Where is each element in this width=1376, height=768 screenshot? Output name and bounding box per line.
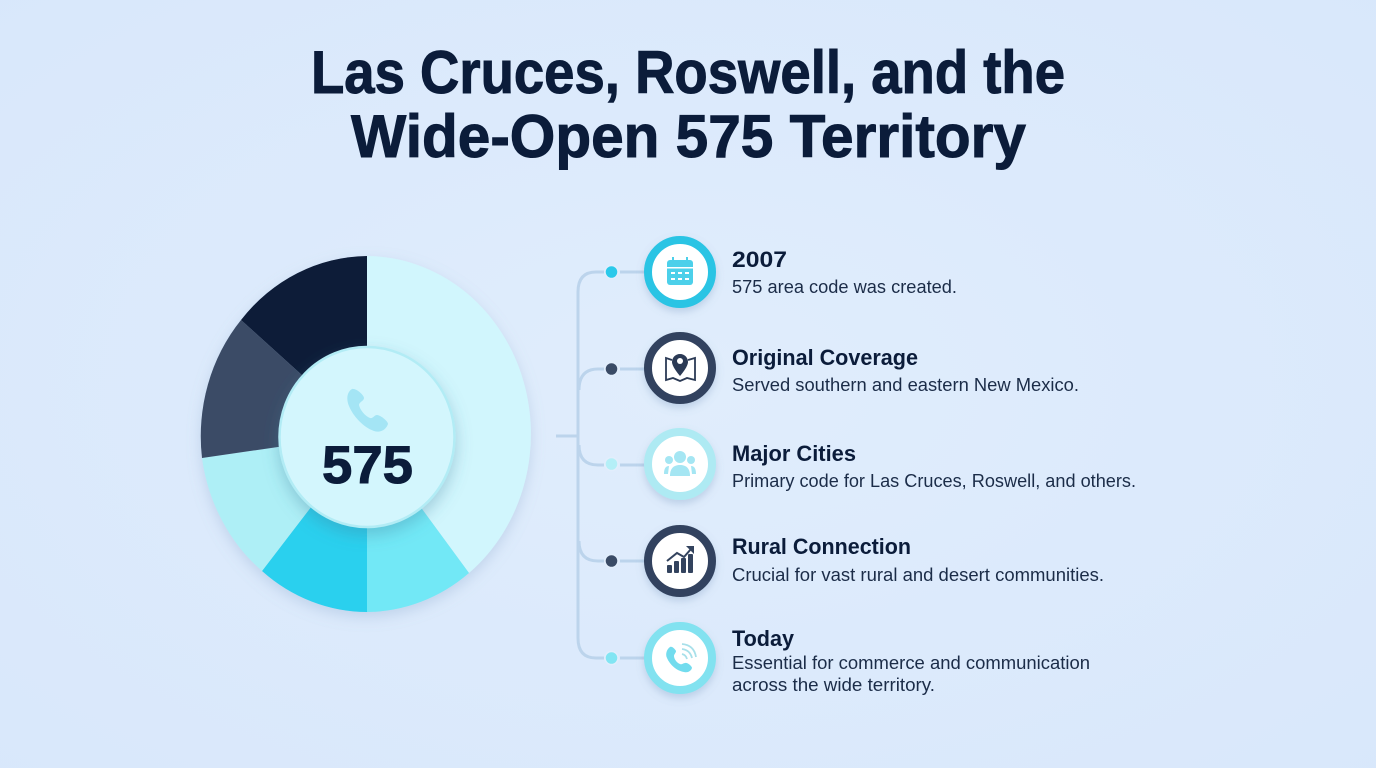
text: today xyxy=(732,653,1090,695)
text: 2007: 575 area code was created. xyxy=(732,277,957,297)
icon: phone with signal xyxy=(648,626,712,690)
icon: growth chart xyxy=(648,529,712,593)
title xyxy=(311,39,1065,170)
heading: 2007: 2007 xyxy=(732,247,787,272)
heading: major cities: Major Cities xyxy=(732,441,856,466)
timeline dots xyxy=(605,266,618,664)
item: today xyxy=(648,626,1090,695)
icon: calendar xyxy=(648,240,712,304)
text: rural connection: Crucial for vast rural and desert communities. xyxy=(732,565,1104,585)
title: Las Cruces, Roswell, and the xyxy=(311,39,1065,106)
title: Wide-Open 575 Territory xyxy=(351,103,1027,170)
pie chart xyxy=(201,256,531,612)
pie segments xyxy=(201,256,531,612)
text: today: across the wide territory. xyxy=(732,675,935,695)
icon: map pin xyxy=(648,336,712,400)
item: rural connection xyxy=(648,529,1104,593)
item: major cities xyxy=(648,432,1136,496)
center number: 575 xyxy=(322,436,413,495)
text: today: Essential for commerce and communication xyxy=(732,653,1090,673)
text: major cities: Primary code for Las Cruces, Roswell, and others. xyxy=(732,471,1136,491)
item: 2007 xyxy=(648,240,957,304)
heading: today: Today xyxy=(732,626,795,651)
item: original coverage xyxy=(648,336,1079,400)
icon: people xyxy=(648,432,712,496)
connector tree xyxy=(556,272,646,658)
center badge xyxy=(280,347,454,527)
icon: phone xyxy=(347,389,388,432)
text: original coverage: Served southern and eastern New Mexico. xyxy=(732,375,1079,395)
heading: original coverage: Original Coverage xyxy=(732,345,918,370)
heading: rural connection: Rural Connection xyxy=(732,534,911,559)
